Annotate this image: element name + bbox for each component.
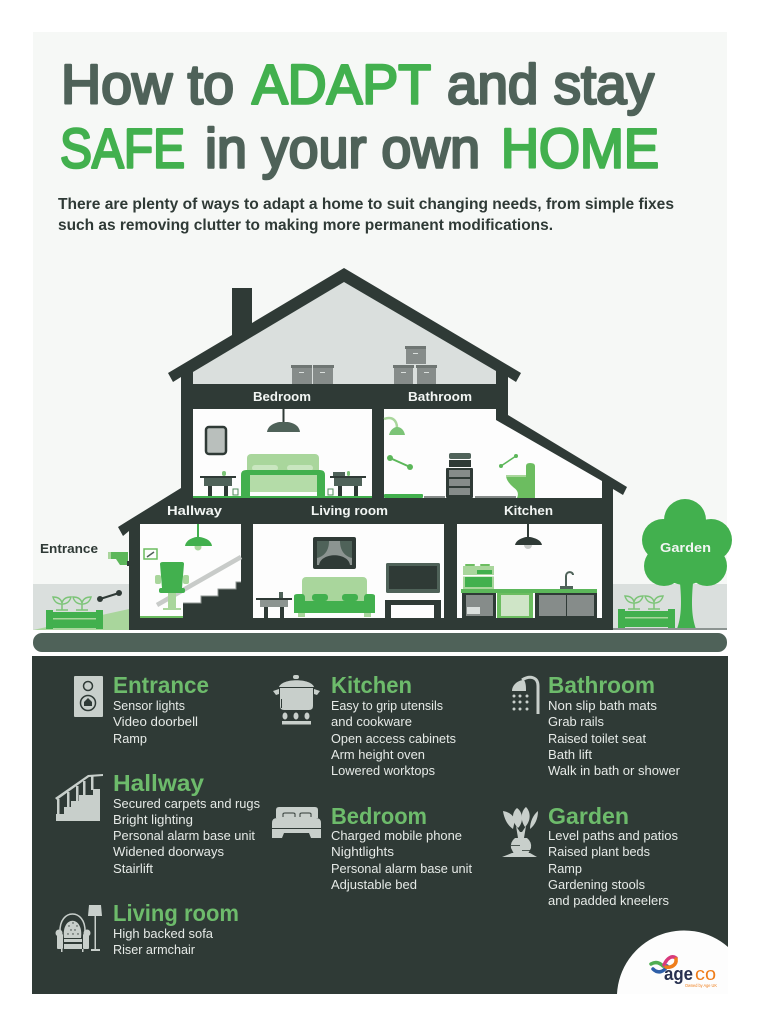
section: entrance: Entrance [113, 672, 209, 698]
room labels: Living room [311, 503, 388, 518]
logo corner [617, 930, 728, 994]
cabinet [446, 453, 473, 498]
ceiling lamp [267, 409, 300, 432]
section: garden [548, 803, 678, 908]
section: entrance: Video doorbell [113, 714, 198, 729]
section: kitchen: Arm height oven [331, 747, 425, 762]
section: bedroom: Nightlights [331, 844, 395, 859]
hallway floor [140, 616, 183, 618]
section: living room: High backed sofa [113, 926, 214, 941]
icon: root vegetable [502, 807, 538, 857]
title: ADAPT [252, 52, 431, 116]
section: garden: and padded kneelers [548, 893, 669, 908]
garden ground left [33, 584, 129, 630]
section: bedroom: Adjustable bed [331, 877, 417, 892]
sofa [294, 577, 375, 617]
section: hallway: Widened doorways [113, 844, 224, 859]
icon: stairs [55, 774, 103, 821]
grab rail right [499, 454, 518, 468]
tree: Garden [660, 540, 711, 555]
logo: age co: age [664, 964, 693, 984]
title: in your own [205, 116, 480, 180]
section: kitchen: Lowered worktops [331, 763, 435, 778]
icon: bed [272, 807, 321, 838]
shower [384, 418, 405, 435]
intro text: There are plenty of ways to adapt a home to suit changing needs, from simple fixes [58, 196, 674, 213]
stairs [183, 582, 241, 618]
title: HOME [501, 116, 659, 180]
icon: armchair and lamp [56, 905, 102, 952]
mirror [206, 427, 226, 454]
section: kitchen: Kitchen [331, 672, 412, 698]
raised planter right [618, 596, 675, 628]
section: bedroom: Personal alarm base unit [331, 861, 472, 876]
bed [241, 454, 325, 497]
tv stand [385, 600, 441, 618]
room labels: Bedroom [253, 389, 311, 404]
section: garden: Garden [548, 803, 629, 829]
hallway furniture [140, 524, 241, 618]
logo: age co: co [695, 964, 716, 984]
picture [144, 549, 157, 559]
living room furniture [256, 537, 441, 618]
icon: security camera [108, 552, 130, 566]
section: hallway: Secured carpets and rugs [113, 796, 260, 811]
intro text [58, 196, 674, 234]
section: kitchen: and cookware [331, 714, 412, 729]
worktop [461, 589, 597, 593]
side table [256, 592, 292, 618]
garden ground right [613, 584, 727, 629]
section: bedroom: Bedroom [331, 803, 427, 829]
section: garden: Ramp [548, 861, 582, 876]
road [33, 633, 727, 652]
room labels: Hallway [167, 503, 223, 518]
oven [463, 564, 494, 589]
section: kitchen [331, 672, 456, 778]
section: bathroom: Bath lift [548, 747, 592, 762]
kitchen furniture [461, 524, 597, 618]
title: and stay [447, 52, 654, 116]
title: How to [61, 52, 234, 116]
kitchen lamp [515, 524, 542, 549]
bedroom furniture [193, 409, 372, 498]
cabinets [462, 593, 597, 618]
section: hallway: Bright lighting [113, 812, 193, 827]
section: hallway [113, 770, 260, 876]
bath mats [384, 494, 516, 498]
intro text: such as removing clutter to making more permanent modifications. [58, 217, 553, 234]
raised planter left [46, 597, 103, 629]
section: entrance [113, 672, 209, 746]
toilet [506, 463, 535, 498]
room labels: Bathroom [408, 389, 472, 404]
section: bathroom [548, 672, 681, 778]
icon: doorbell [74, 676, 103, 717]
section: bathroom: Walk in bath or shower [548, 763, 681, 778]
title: SAFE [60, 116, 185, 180]
section: garden: Level paths and patios [548, 828, 678, 843]
sink tap [560, 572, 573, 589]
section: bathroom: Raised toilet seat [548, 731, 646, 746]
section: entrance: Sensor lights [113, 698, 185, 713]
section: living room: Living room [113, 900, 239, 926]
stair rail [157, 557, 241, 605]
section: hallway: Hallway [113, 770, 204, 796]
title [60, 52, 659, 180]
room labels [167, 389, 553, 518]
panel: room adaptations [32, 656, 728, 994]
icon: ramp grab rail [97, 590, 122, 602]
attic boxes left [291, 365, 334, 384]
section: kitchen: Open access cabinets [331, 731, 456, 746]
entrance label: Entrance [40, 541, 98, 556]
section: hallway: Personal alarm base unit [113, 828, 255, 843]
bathroom furniture [384, 418, 535, 498]
bedroom floor [193, 496, 372, 498]
room labels: Kitchen [504, 503, 553, 518]
grab rail left [387, 455, 413, 470]
logo: age co: Owned by Age UK [685, 983, 717, 988]
section: garden: Gardening stools [548, 877, 645, 892]
section: living room: Riser armchair [113, 942, 196, 957]
wall picture [313, 537, 356, 569]
logo swirl [651, 957, 676, 972]
section: bathroom: Non slip bath mats [548, 698, 657, 713]
attic boxes right [393, 346, 437, 384]
bedside table left [200, 471, 238, 496]
television [386, 563, 440, 593]
house structure [118, 268, 627, 630]
stairlift [155, 562, 189, 610]
section: bathroom: Bathroom [548, 672, 655, 698]
section: bathroom: Grab rails [548, 714, 604, 729]
section: garden: Raised plant beds [548, 844, 650, 859]
icon: cooking pot [273, 675, 320, 724]
section: kitchen: Easy to grip utensils [331, 698, 443, 713]
section: entrance: Ramp [113, 731, 147, 746]
section: bedroom [331, 803, 472, 892]
hallway lamp [185, 524, 212, 550]
bedside table right [328, 471, 366, 496]
tree [642, 499, 732, 629]
icon: shower [512, 677, 538, 714]
section: bedroom: Charged mobile phone [331, 828, 462, 843]
section: living room [113, 900, 239, 957]
section: hallway: Stairlift [113, 861, 153, 876]
logo: age co [651, 957, 717, 988]
